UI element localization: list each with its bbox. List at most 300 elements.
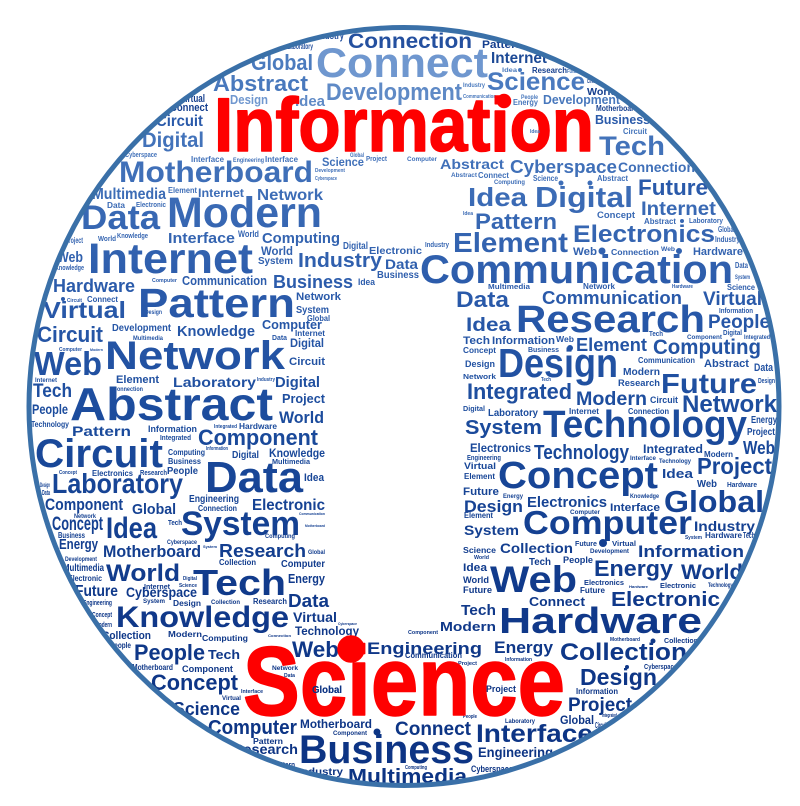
words: middle-left section: System	[296, 305, 329, 316]
words: bottom section: People	[563, 555, 593, 565]
words: top section	[55, 30, 750, 292]
words: middle-left section: People	[32, 401, 68, 417]
words: bottom section: Computing	[202, 634, 248, 643]
words: bottom section: Energy	[288, 571, 326, 586]
words: middle-right section: Laboratory	[488, 408, 538, 419]
words: middle-right section: Element	[464, 511, 493, 520]
words: bottom section: Electronic	[68, 574, 102, 583]
words: top section: Data	[735, 261, 748, 270]
words: bottom section: Research	[219, 541, 306, 561]
words: bottom section: Research	[233, 741, 298, 757]
words: top section: Global	[350, 153, 364, 159]
words: middle-right section: Element	[576, 335, 647, 355]
words: middle-left section: Computing	[168, 448, 205, 457]
words: bottom section: Virtual	[222, 696, 241, 702]
words: bottom section: Engineering	[367, 639, 482, 658]
words: top section: Computer	[407, 157, 438, 163]
words: middle-right section: Energy	[751, 415, 777, 426]
words: middle-left section: Connect	[87, 295, 118, 304]
words: middle-right section: People	[708, 312, 770, 333]
words: top section: Laboratory	[287, 42, 313, 51]
words: middle-right section: Research	[618, 378, 660, 388]
words: top section: Project	[366, 156, 388, 163]
words: middle-left section: Data	[272, 335, 287, 342]
words: bottom section: Global	[308, 550, 325, 556]
words: middle-right section: Science	[727, 283, 756, 292]
words: middle-left section: Development	[112, 323, 172, 334]
words: middle-left section: Element	[116, 374, 159, 386]
words: middle-right section: Data	[754, 362, 774, 374]
words: middle-right section: Tech	[743, 531, 755, 540]
words: middle-right section: Multimedia	[488, 284, 530, 291]
words: bottom section: Digital	[183, 576, 198, 582]
words: top section: Electronic	[136, 202, 166, 209]
words: top section: Science	[487, 68, 585, 96]
words: bottom section: Industry	[298, 767, 343, 778]
words: top section: Data	[81, 199, 161, 237]
words: middle-right section: Digital	[723, 330, 742, 337]
words: middle-right section: Interface	[610, 502, 660, 514]
words: bottom section: Electronic	[660, 583, 696, 590]
words: bottom section: Information	[505, 657, 532, 663]
words: top section: Web	[573, 246, 597, 258]
words: middle-left section: Motherboard	[305, 523, 325, 528]
words: middle-left section: Internet	[35, 378, 57, 384]
words: top section: Web	[57, 249, 83, 266]
words: middle-left section: Idea	[304, 472, 325, 484]
words: bottom section: Future	[575, 541, 597, 548]
words: middle-right section: Data	[456, 287, 510, 312]
words: bottom section: Component	[408, 630, 438, 636]
words: middle-left section: Design	[145, 310, 162, 316]
words: top section: Internet	[491, 50, 548, 67]
words: middle-left section: Global	[307, 314, 330, 323]
words: middle-right section: Technology	[543, 404, 747, 446]
words: middle-left section: Abstract	[70, 378, 273, 430]
words: middle-left section: Internet	[295, 329, 325, 338]
words: top section: Research	[532, 66, 567, 75]
words: middle-left section: Project	[282, 391, 326, 406]
words: top section: World	[587, 87, 617, 98]
words: middle-left section: World	[279, 408, 324, 427]
words: top section: Network	[257, 187, 323, 204]
words: middle-left section: Tech	[168, 520, 182, 527]
words: bottom section: Computer	[208, 717, 297, 739]
words: top section: World	[98, 236, 116, 243]
words: top section: World	[238, 229, 259, 239]
words: bottom section: Science	[463, 546, 497, 555]
words: middle-left section: Connection	[113, 387, 143, 393]
words: top section: Virtual	[180, 93, 205, 105]
words: middle-left section: Digital	[275, 374, 320, 391]
words: bottom section: Component	[182, 664, 233, 674]
words: bottom section: Design	[580, 664, 657, 690]
words: bottom section: Motherboard	[132, 663, 173, 672]
words: bottom section: System	[203, 544, 217, 549]
words: top section: Digital	[343, 241, 368, 252]
words: middle-right section: Industry	[694, 518, 755, 534]
words: middle-left section: Pattern	[72, 423, 131, 439]
words: middle-right section: Web	[743, 438, 775, 458]
words: top section: Element	[168, 186, 197, 195]
words: middle-right section: Information	[492, 335, 555, 347]
words: top section: Computing	[494, 180, 525, 186]
words: top section: Business	[377, 270, 419, 281]
words: bottom section: Motherboard	[300, 717, 372, 731]
words: top section: Science	[533, 174, 558, 183]
words: middle-left section: Hardware	[239, 422, 278, 431]
words: middle-left section	[31, 272, 353, 545]
words: middle-right section: Communication	[638, 356, 695, 365]
words: bottom section: Virtual	[612, 541, 636, 548]
words: middle-left section: Communication	[299, 511, 325, 516]
words: middle-left section: Technology	[31, 420, 69, 429]
words: top section: Business	[595, 112, 650, 127]
words: middle-left section: Circuit	[35, 432, 163, 476]
words: top section: Abstract	[644, 217, 676, 226]
words: bottom section: Connection	[268, 633, 292, 638]
words: bottom section: Interface	[476, 720, 593, 748]
words: bottom section: Communication	[405, 651, 462, 660]
words: middle-left section: Computer	[262, 317, 322, 332]
words: middle-right section: Business	[528, 347, 559, 354]
words: top section: Pattern	[482, 39, 523, 51]
words: bottom section: People	[463, 714, 477, 720]
words: bottom section: Motherboard	[610, 637, 640, 643]
words: top section: Digital	[535, 182, 633, 214]
small round dots among the words	[61, 68, 684, 736]
words: top section: Engineering	[233, 158, 264, 164]
words: top section: Hardware	[693, 246, 743, 258]
words: bottom section: Integrated	[602, 713, 617, 719]
words: bottom section: Research	[253, 597, 287, 606]
words: top section: Abstract	[213, 71, 309, 96]
words: middle-right section: Web	[697, 479, 717, 490]
words: middle-right section: Information	[719, 308, 753, 315]
words: top section: Science	[322, 155, 364, 169]
words: middle-left section: Laboratory	[173, 374, 256, 390]
words: bottom section: Cyberspace	[126, 584, 197, 600]
words: middle-left section: Digital	[232, 450, 259, 461]
words: middle-left section: Concept	[52, 514, 103, 535]
words: middle-right section: Idea	[662, 466, 694, 481]
words: bottom section: Circuit	[595, 721, 607, 730]
words: middle-right section: Virtual	[464, 461, 496, 471]
words: middle-right section: System	[685, 535, 703, 541]
words: bottom section: Network	[272, 666, 299, 672]
words: top section: Knowledge	[55, 265, 84, 272]
words: top section: Cyberspace	[125, 152, 157, 159]
words: middle-left section: Business	[58, 531, 85, 540]
words: bottom section: Collection	[500, 540, 573, 556]
words: middle-right section: Project	[697, 453, 772, 479]
words: middle-left section: Business	[168, 457, 202, 466]
words: bottom section: Electronic	[611, 589, 720, 611]
words: bottom section: Project	[458, 661, 477, 667]
words: bottom section: Collection	[560, 639, 687, 666]
words: middle-right section: Modern	[704, 450, 733, 459]
words: bottom section: Information	[576, 687, 618, 696]
words inside the red heading letters: Project	[486, 684, 516, 694]
words: middle-right section: Network	[583, 282, 616, 291]
words: middle-right section: Design	[465, 359, 495, 369]
words: bottom section: Tech	[193, 562, 286, 603]
words: bottom section: Modern	[168, 630, 202, 639]
words: middle-left section: Electronic	[252, 497, 325, 514]
words: middle-right section: Design	[464, 497, 523, 516]
words: middle-left section: Network	[296, 291, 342, 303]
words: bottom section: Concept	[151, 670, 239, 695]
words: top section: Industry	[463, 83, 486, 89]
words: top section: Interface	[191, 155, 225, 164]
words: bottom section: Development	[590, 549, 629, 555]
words: bottom section: Tech	[529, 557, 551, 568]
words: bottom section: Electronics	[584, 580, 624, 587]
words: top section: Motherboard	[119, 156, 313, 189]
words: middle-right section: Virtual	[703, 289, 762, 310]
words: bottom section: Science	[173, 699, 240, 719]
words: top section: Circuit	[156, 113, 204, 130]
words inside the red heading: Idea	[530, 129, 540, 135]
words: top section: Cyberspace	[510, 157, 617, 177]
words: middle-left section: Connection	[198, 504, 237, 513]
words: middle-right section: Idea	[466, 315, 511, 336]
words: bottom section: Pattern	[253, 737, 283, 746]
words: bottom section: Virtual	[293, 609, 337, 625]
words: middle-left section: Business	[273, 272, 353, 292]
words: bottom section: Cyberspace	[167, 540, 198, 546]
words: middle-left section: Computer	[59, 347, 82, 353]
words: bottom section: Laboratory	[505, 719, 536, 725]
words: bottom section: Future	[75, 583, 118, 600]
words: middle-left section: Tech	[33, 381, 72, 402]
words: top section: Cyberspace	[315, 176, 337, 182]
words: bottom section: Computer	[281, 559, 325, 570]
words: middle-left section: Integrated	[214, 424, 237, 430]
words: top section: Development	[543, 92, 621, 107]
words: bottom section: Energy	[494, 638, 554, 657]
words: top section: Data	[107, 201, 126, 210]
words: middle-right section: Tech	[541, 377, 551, 383]
words: middle-right section: Integrated	[744, 335, 770, 341]
words: top section: Connection	[618, 159, 695, 175]
words: middle-right section: Computer	[523, 504, 692, 541]
words: middle-left section: Engineering	[189, 494, 239, 505]
words: middle-right section	[456, 282, 778, 541]
words: top section: Electronic	[369, 246, 422, 257]
words: middle-left section: Network	[74, 514, 97, 520]
words: top section: Circuit	[587, 79, 598, 85]
words: middle-right section: Design	[498, 340, 618, 386]
heading: Information (red): Information	[214, 83, 594, 168]
words: bottom section: Connect	[529, 594, 586, 609]
words: bottom section: Modern	[95, 622, 112, 629]
words: bottom section: Collection	[211, 600, 240, 606]
words: middle-right section: Interface	[630, 456, 657, 462]
words: middle-left section: Communication	[182, 273, 267, 288]
words: top section: Communication	[420, 248, 733, 292]
words: bottom section: Development	[65, 557, 97, 563]
words: top section: Knowledge	[117, 233, 148, 240]
words: top section: Tech	[599, 131, 665, 161]
words: middle-right section: Computer	[570, 510, 601, 516]
words: middle-right section: Electronics	[470, 441, 531, 455]
words: top section: Connection	[348, 30, 472, 53]
words: bottom section: Future	[463, 585, 492, 595]
words: bottom section: Motherboard	[103, 542, 201, 561]
words: middle-left section: Design	[40, 483, 50, 489]
words: top section: Industry	[313, 30, 345, 42]
words: middle-right section: System	[465, 417, 542, 439]
words: bottom section: Cyberspace	[338, 621, 358, 626]
words: top section: Connection	[611, 248, 659, 257]
words: top section: Idea	[358, 277, 376, 287]
heading: Science (red): Science	[243, 626, 565, 736]
words: top section: Industry	[425, 242, 449, 249]
words: top section: Future	[567, 69, 580, 75]
words: bottom section: Cyberspace	[471, 764, 513, 774]
words: bottom section: Collection	[219, 558, 256, 567]
words: middle-right section: Future	[661, 368, 757, 399]
words: middle-left section: Web	[34, 345, 102, 382]
words: middle-right section: Energy	[503, 494, 524, 500]
words: bottom section: Hardware	[499, 600, 702, 641]
words: top section: Design	[230, 92, 268, 107]
words: bottom section: System	[143, 599, 165, 605]
words: bottom section: World	[681, 561, 743, 584]
words: bottom section: Idea	[463, 562, 488, 574]
words: bottom section: Computing	[405, 765, 427, 771]
words: top section: Idea	[295, 93, 326, 110]
words: middle-right section: Network	[682, 391, 778, 418]
words: middle-right section: Knowledge	[630, 494, 660, 500]
words: middle-right section: Internet	[569, 407, 599, 416]
words: middle-left section: Knowledge	[269, 446, 325, 460]
words: top section: Multimedia	[92, 186, 166, 203]
words: bottom section: Web	[292, 637, 339, 662]
words: middle-left section: Data	[42, 490, 50, 497]
words: bottom section: Collection	[102, 630, 151, 642]
words: middle-left section: Data	[205, 453, 304, 502]
words: middle-right section: Web	[556, 335, 574, 344]
words: top section: Energy	[513, 98, 539, 107]
words: middle-left section: Integrated	[160, 435, 191, 442]
words: top section: People	[521, 95, 539, 101]
words: middle-right section: Tech	[649, 331, 663, 338]
words: bottom section: Modern	[440, 619, 496, 634]
words: middle-left section: Computing	[265, 534, 295, 540]
words: middle-left section: Laboratory	[52, 468, 183, 499]
words: bottom section: Data	[288, 591, 330, 611]
words: bottom section: Tech	[208, 647, 240, 662]
words: bottom section: Tech	[461, 602, 496, 619]
words: top section: Global	[718, 225, 735, 234]
words: middle-right section: Digital	[463, 406, 485, 413]
words: bottom section: Design	[173, 599, 201, 608]
words: bottom section: Business	[299, 728, 474, 772]
words: middle-left section: Knowledge	[177, 323, 255, 340]
words: bottom section: Global	[560, 713, 594, 727]
words: middle-left section: Multimedia	[272, 459, 310, 466]
words: middle-left section: Idea	[106, 512, 157, 545]
words: bottom section: Hardware	[629, 584, 649, 589]
words: middle-left section: Multimedia	[133, 336, 164, 342]
words: middle-right section: Research	[516, 299, 705, 341]
words: middle-right section: Hardware	[727, 482, 757, 489]
words: bottom section: Collection	[664, 638, 698, 645]
words: bottom section: Engineering	[83, 600, 112, 607]
words: top section: Interface	[265, 155, 299, 164]
words: top section: Connect	[170, 102, 208, 114]
words: bottom section: Component	[333, 731, 367, 737]
words: bottom section: Technology	[295, 624, 359, 638]
words: bottom section: Information	[638, 542, 744, 561]
words: bottom section: Energy	[594, 556, 674, 581]
words: top section: Idea	[502, 68, 518, 74]
words: top section: Digital	[142, 129, 204, 152]
words: top section: Computing	[262, 230, 340, 247]
words: top section: Concept	[597, 210, 635, 220]
words: middle-right section: Connection	[628, 407, 669, 416]
words inside the red heading letters: Global	[312, 685, 342, 696]
words: top section: Pattern	[475, 209, 557, 234]
words: middle-left section: Research	[140, 470, 167, 477]
words: middle-right section: Circuit	[650, 395, 678, 405]
words: top section: Interface	[168, 230, 235, 247]
words: middle-left section: Virtual	[43, 297, 126, 323]
words: middle-right section: Design	[758, 378, 775, 385]
words: middle-right section: Integrated	[467, 379, 572, 404]
words: top section: Industry	[715, 235, 740, 244]
words: middle-right section: Component	[687, 335, 722, 341]
words: middle-left section: People	[167, 466, 198, 477]
words: middle-right section: Technology	[659, 459, 692, 465]
words: top section: Motherboard	[596, 104, 638, 113]
words: bottom section: Concept	[92, 612, 112, 619]
words: middle-right section: Hardware	[672, 284, 693, 290]
words: top section: Abstract	[451, 173, 477, 179]
words: middle-left section: Pattern	[138, 280, 295, 326]
words: top section: Abstract	[440, 156, 504, 172]
words: top section: Internet	[198, 186, 244, 200]
words: bottom section: World	[463, 575, 489, 585]
words: bottom section: Data	[284, 673, 295, 679]
words: middle-right section: Hardware	[705, 531, 743, 540]
words: middle-right section: Communication	[542, 288, 682, 308]
words: top section: Modern	[167, 189, 322, 237]
words: middle-right section: Concept	[463, 346, 496, 355]
words: middle-right section: Future	[463, 486, 499, 498]
words: top section: Industry	[298, 250, 383, 272]
words: middle-left section: Global	[132, 501, 176, 518]
words: middle-left section: Modern	[90, 347, 103, 352]
words: middle-right section: Computing	[653, 336, 761, 359]
words: bottom section: Engineering	[478, 744, 553, 760]
words: top section: Circuit	[623, 127, 647, 136]
words: top section: Communication	[463, 94, 496, 100]
words: bottom section: Pattern	[273, 762, 295, 769]
words: middle-left section: Network	[105, 334, 286, 378]
words: bottom section: Global	[312, 685, 342, 696]
words: bottom section: Science	[179, 583, 197, 589]
words: top section: Project	[65, 236, 83, 245]
words: middle-left section: Computer	[152, 278, 177, 284]
words: middle-left section: Component	[45, 495, 123, 514]
words: middle-left section: Circuit	[289, 356, 325, 368]
words: bottom section: People	[110, 641, 131, 650]
words: bottom section: World	[106, 560, 180, 587]
words: middle-right section: Abstract	[704, 358, 749, 370]
